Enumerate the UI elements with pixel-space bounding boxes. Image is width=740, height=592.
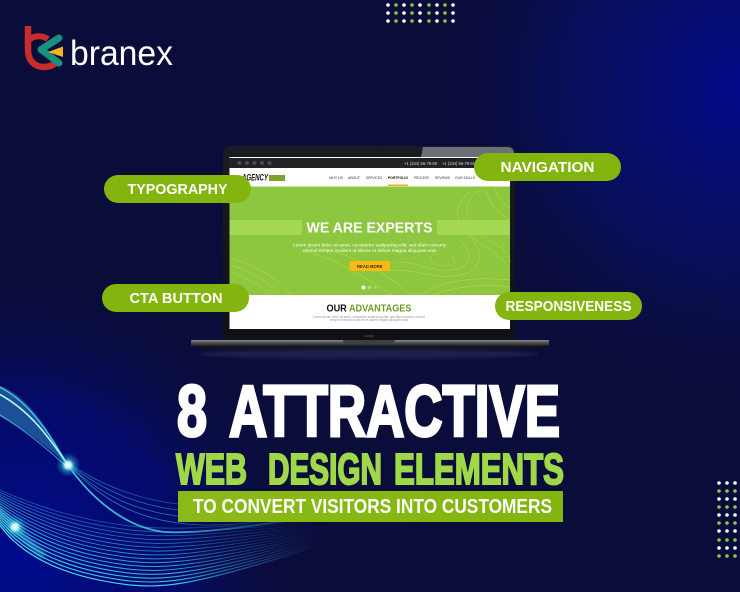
site top bar: +1 (234) 56-78-90 bbox=[404, 161, 438, 166]
site hero bbox=[230, 186, 510, 295]
site nav bar: SERVICES bbox=[366, 175, 382, 180]
logo: branex bbox=[28, 26, 173, 73]
site nav bar: WHY US bbox=[329, 175, 343, 180]
pill: responsiveness bbox=[495, 292, 642, 320]
site nav bar bbox=[230, 168, 510, 186]
pill: responsiveness: RESPONSIVENESS bbox=[506, 299, 632, 315]
pill: navigation bbox=[474, 153, 621, 181]
site advantages section: Lorem ipsum dolor sit amet, consetetur sadipscing elitr, sed diam nonumy eirmod bbox=[313, 315, 425, 319]
laptop label: Laptop bbox=[364, 334, 374, 338]
laptop lid bbox=[223, 146, 515, 340]
pill: cta button bbox=[102, 284, 249, 312]
laptop mockup bbox=[191, 146, 549, 359]
site nav bar: ABOUT bbox=[348, 175, 361, 180]
site top bar bbox=[230, 158, 510, 168]
hero contour lines bbox=[230, 188, 510, 295]
dot grid: top bbox=[386, 3, 455, 23]
pill: typography bbox=[104, 175, 251, 203]
site top bar: +1 (234) 56-78-91 bbox=[442, 161, 476, 166]
pill: typography: TYPOGRAPHY bbox=[128, 182, 228, 198]
pill: navigation: NAVIGATION bbox=[500, 160, 594, 176]
laptop reflection bbox=[199, 349, 539, 359]
heading: web design elements bbox=[176, 445, 564, 494]
site advantages section: tempor invidunt ut labore et dolore magna aliquyam erat bbox=[330, 318, 408, 322]
hero button: READ MORE bbox=[357, 264, 383, 269]
logo wordmark: branex bbox=[70, 34, 173, 73]
dot grid: right bbox=[717, 481, 737, 558]
laptop base bbox=[191, 340, 549, 349]
title: 8 attractive bbox=[177, 372, 560, 452]
title: 8 attractive: ATTRACTIVE bbox=[229, 372, 560, 452]
site hero: WE ARE EXPERTS bbox=[306, 220, 432, 236]
site hero: eirmod tempor invidunt ut labore et dolore magna aliquyam erat bbox=[303, 248, 437, 254]
site nav bar: PORTFOLIO bbox=[388, 175, 408, 180]
icon: branex mark bbox=[28, 26, 63, 67]
heading: web design elements: DESIGN bbox=[268, 445, 382, 494]
heading: web design elements: ELEMENTS bbox=[394, 445, 564, 494]
light wave decoration bbox=[0, 384, 320, 586]
hero button bbox=[350, 261, 390, 271]
carousel dots bbox=[362, 286, 366, 290]
hero title band bbox=[230, 220, 302, 235]
site nav bar: PROCESS bbox=[414, 175, 429, 180]
site advantages section bbox=[313, 304, 425, 322]
subtitle strip bbox=[178, 491, 563, 522]
site nav bar: OUR SKILLS bbox=[455, 175, 475, 180]
hero copy: Lorem ipsum dolor sit amet, consetetur sadipscing elitr, sed diam nonumy bbox=[293, 242, 447, 248]
subtitle strip: TO CONVERT VISITORS INTO CUSTOMERS bbox=[193, 495, 552, 518]
site nav bar: AGENCY bbox=[241, 172, 269, 182]
heading: web design elements: WEB bbox=[176, 445, 247, 494]
title: 8 attractive: 8 bbox=[177, 372, 207, 452]
site nav bar: REVIEWS bbox=[435, 175, 450, 180]
site advantages section: OUR ADVANTAGES bbox=[326, 304, 412, 314]
pill: cta button: CTA BUTTON bbox=[130, 291, 222, 307]
website screen bbox=[230, 157, 510, 329]
